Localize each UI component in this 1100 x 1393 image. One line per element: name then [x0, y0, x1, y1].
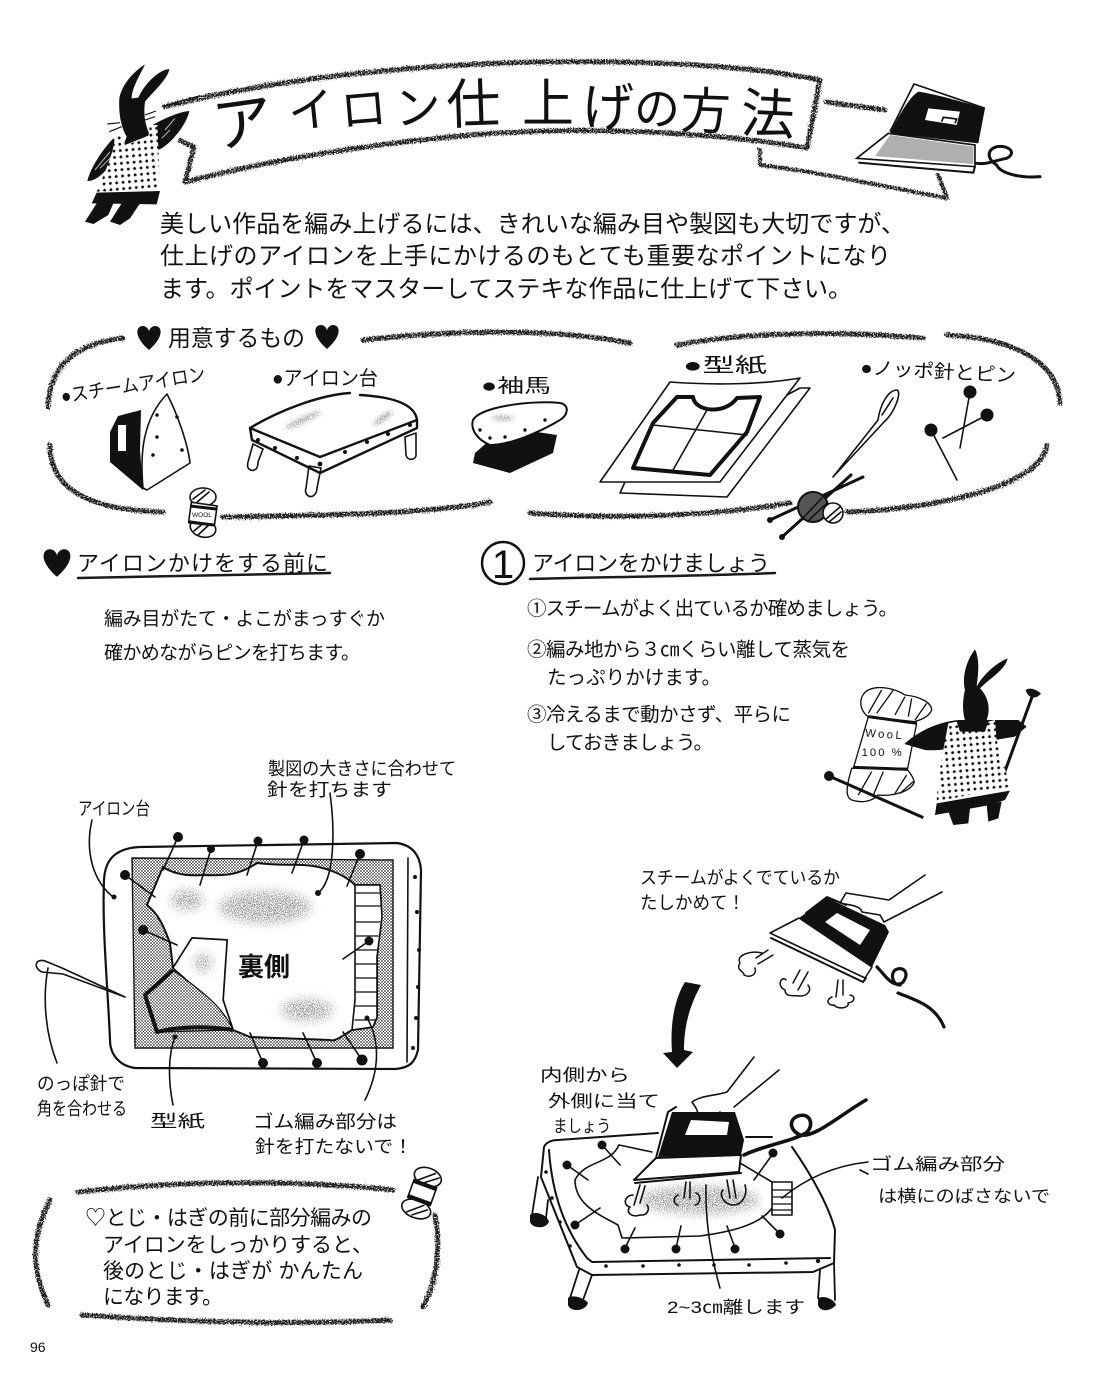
label: ribbing note — [870, 1154, 1050, 1206]
item label: ironing board: ●アイロン台 — [272, 367, 378, 390]
icon: pins — [924, 386, 994, 480]
intro paragraph: 美しい作品を編み上げるには、きれいな編み目や製図も大切ですが、 — [160, 211, 905, 238]
feet — [530, 1213, 836, 1310]
title: 仕 — [445, 74, 501, 136]
text: before ironing: 編み目がたて・よこがまっすぐか — [104, 608, 385, 630]
pins — [562, 1140, 784, 1254]
steam clouds — [739, 950, 854, 1008]
title — [208, 74, 796, 161]
tip text: アイロンをしっかりすると、 — [103, 1234, 373, 1257]
tip text: ♡とじ・はぎの前に部分編みの — [85, 1207, 372, 1230]
text: step 1 instructions: ③冷えるまで動かさず、平らに — [527, 704, 791, 726]
long needle — [36, 960, 125, 1063]
arm — [840, 875, 942, 922]
item label: sleeve board: ●袖馬 — [481, 375, 551, 397]
iron — [770, 897, 889, 982]
text: step 1 instructions: ②編み地から３㎝くらい離して蒸気を — [527, 639, 850, 661]
diagram: pinning the knit on the ironing board — [36, 759, 456, 1157]
label: ribbing note: ゴム編み部分は — [253, 1112, 397, 1132]
icon: yarn hank — [188, 488, 218, 540]
tip panel — [36, 1163, 445, 1322]
icon: heart — [44, 549, 70, 577]
icon: sleeve board — [472, 402, 567, 473]
rabbit with yarn, right: WooL — [865, 728, 902, 742]
heading: supplies — [137, 325, 339, 351]
tip text — [85, 1207, 373, 1309]
icon: steam iron — [110, 394, 190, 490]
blocking pins — [120, 832, 374, 1068]
label: check steam: スチームがよくでているか — [640, 868, 840, 888]
label: apply from inside: 内側から — [540, 1066, 630, 1085]
leader lines — [706, 1162, 868, 1288]
item label: steam iron: ●スチームアイロン — [59, 364, 207, 408]
icon: pattern paper — [600, 378, 810, 497]
label: match corners — [37, 1074, 127, 1119]
title: 上 — [522, 76, 574, 134]
rabbit with yarn, right — [824, 649, 1041, 825]
title: ア — [208, 86, 277, 161]
title: 法 — [739, 84, 796, 147]
label: ribbing note: ゴム編み部分 — [870, 1154, 1005, 1174]
garment back — [147, 863, 380, 1040]
text: before ironing — [104, 608, 385, 664]
label: ironing board: アイロン台 — [78, 799, 150, 819]
page number: 96 — [30, 1339, 46, 1355]
text: step 1 instructions: ①スチームがよく出ているか確めましょう。 — [527, 598, 898, 620]
board outline — [104, 843, 421, 1069]
text: before ironing: 確かめながらピンを打ちます。 — [104, 642, 360, 664]
intro paragraph: 仕上げのアイロンを上手にかけるのもとても重要なポイントになり — [160, 243, 891, 270]
rabbit with apron, top left — [85, 64, 200, 225]
label: back side: 裏側 — [238, 952, 290, 982]
intro paragraph — [160, 211, 905, 303]
label: distance: 2~3㎝離します — [667, 1298, 805, 1317]
iron — [634, 1107, 744, 1183]
tip text: 後のとじ・はぎが かんたん — [103, 1260, 363, 1283]
diagram: check steam — [640, 868, 944, 1068]
label: ribbing note — [253, 1112, 413, 1157]
cord — [744, 1100, 866, 1155]
icon: step number: 1 — [492, 543, 514, 587]
text: step 1 instructions: たっぷりかけます。 — [547, 667, 721, 689]
title: ン — [393, 80, 443, 135]
panel: supplies frame — [48, 332, 1060, 517]
label: match corners: 角を合わせる — [37, 1099, 127, 1119]
heading: step 1: アイロンをかけましょう — [532, 551, 770, 576]
title: の — [634, 83, 680, 135]
gauge pattern corner — [145, 970, 233, 1032]
board edge stitching — [407, 858, 408, 1062]
banner ribbon — [163, 62, 947, 198]
neck opening — [173, 938, 233, 1030]
icon: ironing board — [248, 393, 417, 497]
label: apply from inside: 外側に当て — [548, 1092, 660, 1111]
knit outline — [575, 1145, 772, 1238]
label: match corners: のっぽ針で — [37, 1074, 125, 1094]
section: step 1 ironing — [482, 542, 898, 754]
label: pin to chart size: 製図の大きさに合わせて — [268, 759, 456, 779]
heading: supplies: 用意するもの — [168, 325, 305, 351]
steam blotches — [171, 890, 333, 1021]
title: 方 — [680, 83, 732, 141]
title: ロ — [338, 81, 389, 137]
diagram: ironing on the board — [530, 1057, 1050, 1317]
label: pattern: 型紙 — [150, 1112, 205, 1131]
label: ribbing note: 針を打たないで！ — [255, 1137, 413, 1157]
table edge stitching — [544, 1170, 820, 1268]
item label: pattern paper: ●型紙 — [683, 354, 767, 377]
item label: long needle and pins: ●ノッポ針とピン — [860, 357, 1017, 387]
table — [541, 1133, 835, 1275]
arm — [692, 1057, 779, 1118]
label: apply from inside — [540, 1066, 660, 1136]
label: pin to chart size — [267, 759, 456, 800]
iron illustration, top right — [857, 84, 1040, 177]
label: ribbing note: は横にのばさないで — [878, 1187, 1050, 1206]
icon: step number — [482, 542, 524, 587]
label: pin to chart size: 針を打ちます — [267, 780, 392, 800]
label: apply from inside: ましょう — [553, 1117, 611, 1136]
ribbing — [772, 1182, 792, 1215]
icon: needle — [833, 390, 899, 477]
arrow — [663, 982, 701, 1068]
label: check steam: たしかめて！ — [640, 893, 745, 913]
title: イ — [286, 82, 337, 139]
steam clouds — [625, 1180, 746, 1216]
title: げ — [582, 80, 634, 138]
icon: yarn hank: WOOL — [192, 512, 212, 519]
icon: small yarn hank — [399, 1163, 445, 1223]
tip frame — [36, 1183, 438, 1322]
steam blotch — [639, 1186, 759, 1214]
heading: before ironing: アイロンかけをする前に — [77, 551, 328, 576]
halftone base — [132, 858, 393, 1048]
intro paragraph: ます。ポイントをマスターしてステキな作品に仕上げて下さい。 — [160, 276, 852, 303]
label: check steam — [640, 868, 840, 913]
section: before ironing — [44, 549, 385, 664]
leader lines — [89, 793, 377, 1105]
text: step 1 instructions: しておきましょう。 — [547, 732, 713, 754]
tip text: になります。 — [103, 1286, 223, 1309]
ribbing — [352, 885, 382, 1030]
text: step 1 instructions — [527, 598, 898, 754]
cord — [877, 967, 944, 1027]
icon: yarn balls and knitting needles — [767, 475, 863, 540]
rabbit with yarn, right: 100 % — [862, 747, 902, 759]
legs — [532, 1177, 835, 1300]
